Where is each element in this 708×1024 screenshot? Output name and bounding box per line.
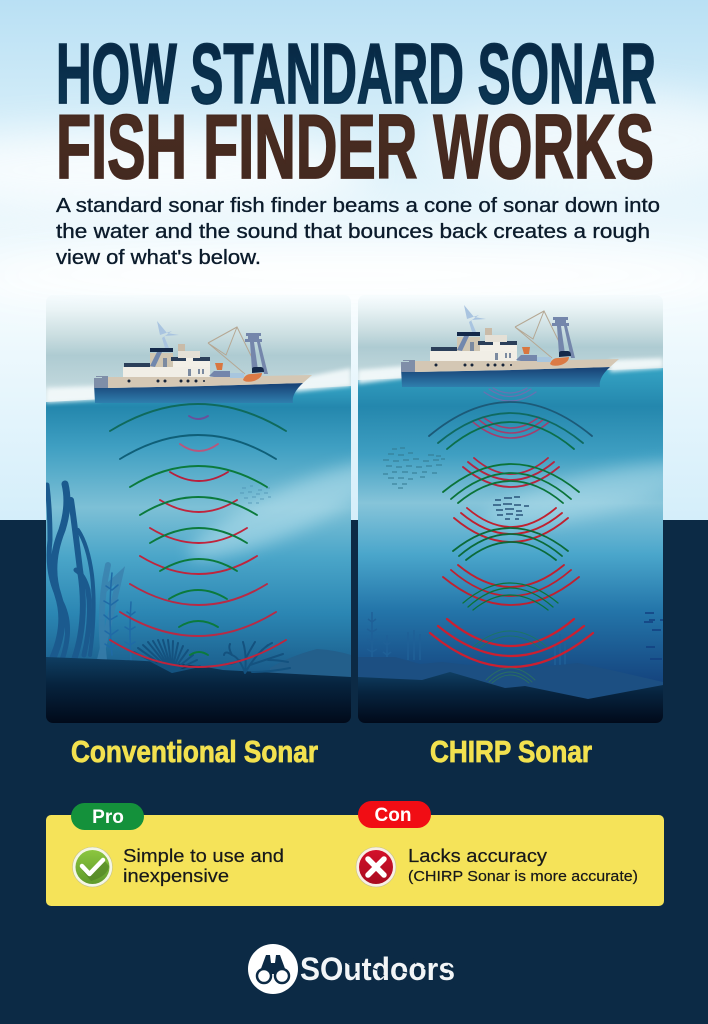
- seabed: [358, 672, 663, 723]
- con badge: Con: [375, 805, 411, 826]
- fish schools: [383, 448, 445, 488]
- con text: [408, 846, 638, 885]
- outgoing sonar arcs: [110, 404, 286, 655]
- coral: [134, 640, 290, 673]
- water: [46, 386, 351, 690]
- fish school: [240, 486, 271, 503]
- water: [358, 368, 663, 690]
- back hills: [358, 657, 663, 700]
- background: navy lower area: [0, 520, 708, 1024]
- intro text: [56, 195, 660, 269]
- kelp: [47, 484, 135, 660]
- right fish: [644, 613, 663, 659]
- icon: binoculars: [248, 944, 298, 994]
- pro text: Simple to use and: [123, 846, 284, 866]
- returning echo arcs: [430, 388, 593, 667]
- outgoing sonar arcs: [429, 402, 592, 683]
- boat: [94, 321, 312, 403]
- returning echo arcs: [110, 416, 286, 667]
- intro text: A standard sonar fish finder beams a cone of sonar down into: [56, 195, 660, 217]
- intro text: the water and the sound that bounces back creates a rough: [56, 221, 650, 243]
- icon: cross mark: [356, 847, 396, 887]
- con text: Lacks accuracy: [408, 846, 547, 866]
- seabed: [46, 657, 351, 723]
- heading: CHIRP sonar: CHIRP Sonar: [430, 734, 592, 769]
- con text: (CHIRP Sonar is more accurate): [408, 868, 638, 885]
- con badge: [358, 801, 431, 828]
- background: sky: [0, 0, 708, 521]
- title: [56, 27, 656, 198]
- pro text: [123, 846, 284, 886]
- sky and horizon: [358, 300, 663, 380]
- seaweed: [368, 612, 566, 665]
- logo: [248, 944, 455, 994]
- wordmark wear specks: [346, 958, 451, 978]
- wordmark: SOutdoors: [300, 951, 455, 987]
- boat: [401, 305, 619, 387]
- yellow box: [46, 815, 664, 906]
- panel: pros and cons: [46, 801, 664, 906]
- pro text: inexpensive: [123, 866, 229, 886]
- panel: conventional sonar: [46, 301, 351, 723]
- pro badge: [71, 803, 144, 830]
- sky and horizon: [46, 295, 351, 405]
- heading: conventional sonar: Conventional Sonar: [71, 734, 318, 769]
- panel: CHIRP sonar: [358, 300, 663, 723]
- intro text: view of what's below.: [56, 247, 261, 269]
- pro badge: Pro: [92, 807, 124, 828]
- icon: check mark: [72, 847, 112, 887]
- back hill: [271, 649, 351, 677]
